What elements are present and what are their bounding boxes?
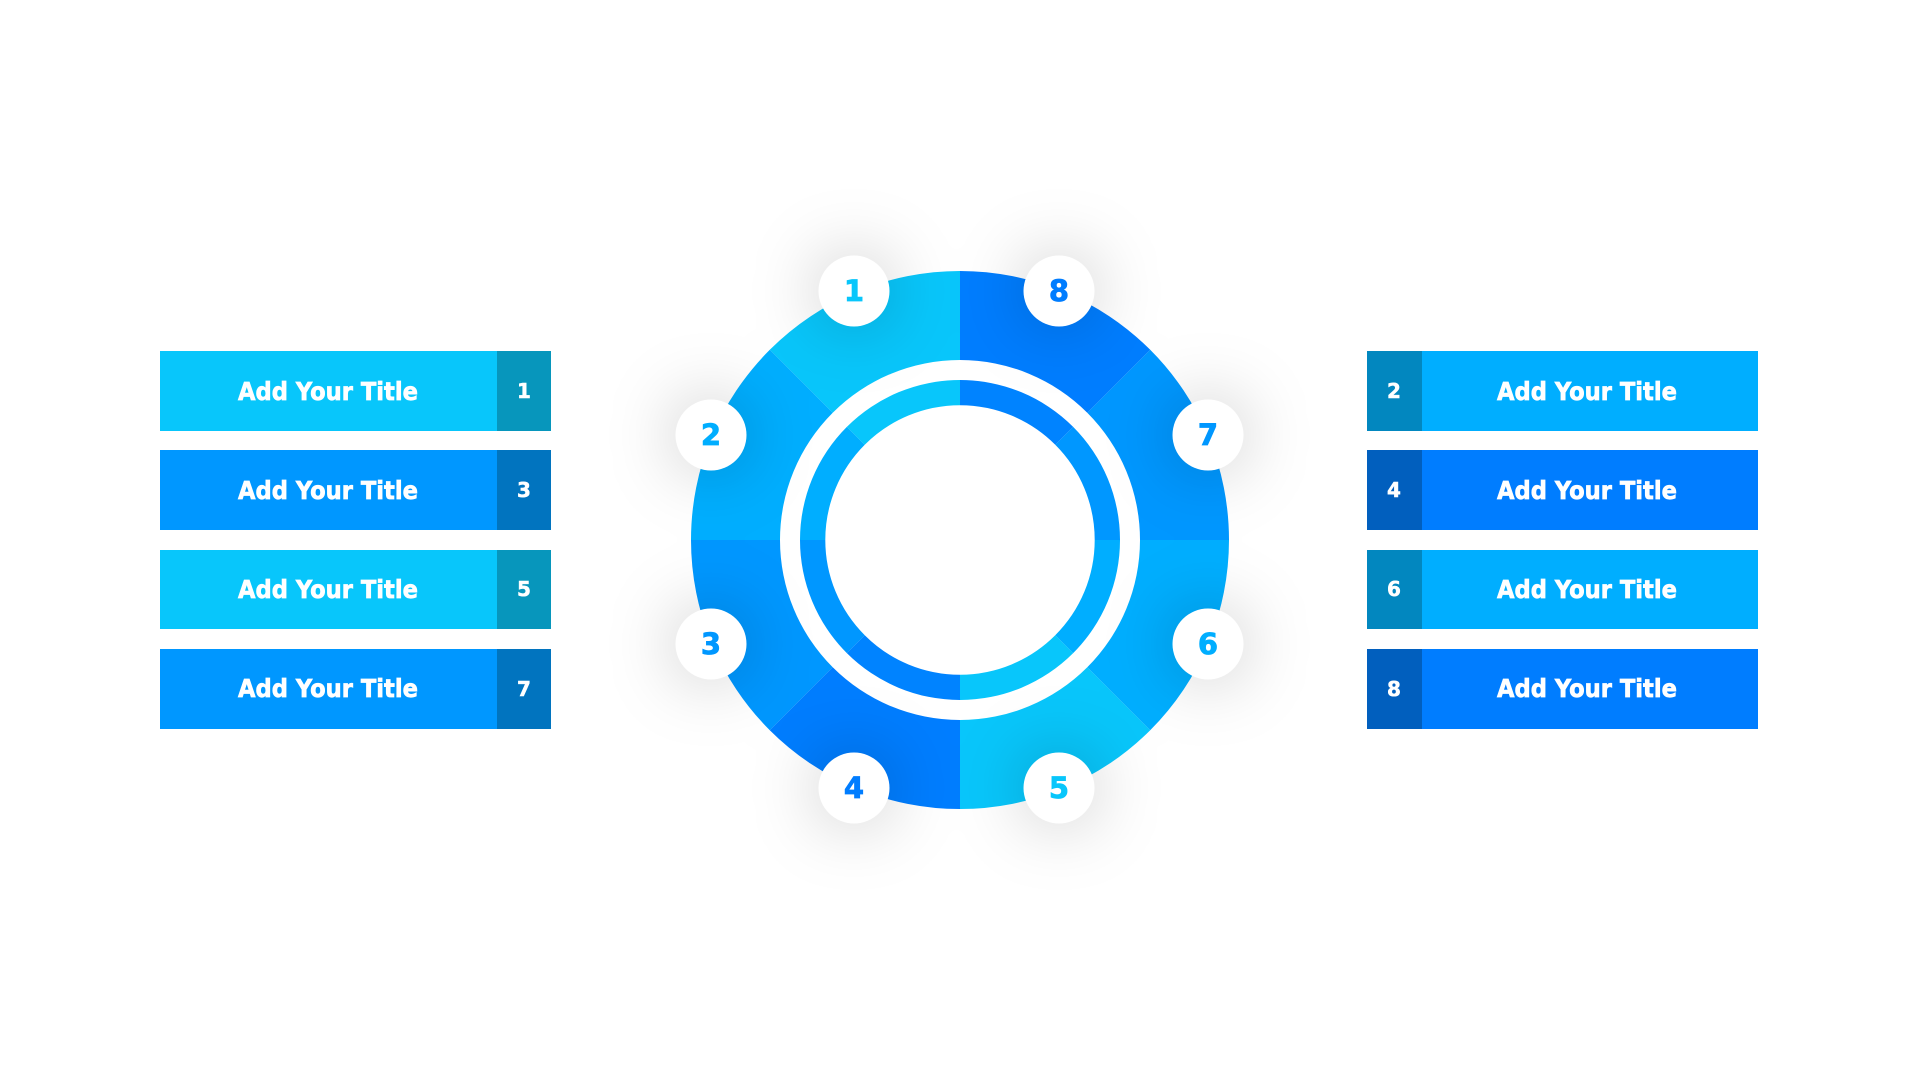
badge 8 [1024,256,1094,326]
bar: title 6 [1367,550,1758,629]
bar: title 5: Add Your Title [238,575,418,604]
bar: title 2: 2 [1387,379,1401,403]
panel: left title bars [160,351,551,729]
bar: title 3: 3 [517,478,531,502]
bar: title 1: Add Your Title [238,377,418,406]
bar: title 7: Add Your Title [238,674,418,703]
bar: title 2: Add Your Title [1497,377,1677,406]
badge 5 [1024,752,1094,824]
bar: title 3: Add Your Title [238,476,418,505]
bar: title 5 [160,550,551,629]
bar: title 4: Add Your Title [1497,476,1677,505]
badge 1 [818,256,890,326]
bar: title 7 [160,649,551,729]
badge 3: 3 [701,627,721,661]
bar: title 8: 8 [1387,677,1401,701]
outer ring segments [691,271,1229,809]
inner ring segments [800,380,1120,700]
badge 7: 7 [1198,418,1218,452]
badge 1: 1 [844,274,864,308]
bar: title 6: Add Your Title [1497,575,1677,604]
badge 4 [818,752,890,824]
bar: title 2 [1367,351,1758,431]
badge 2 [676,400,746,470]
badge 2: 2 [701,418,721,452]
bar: title 3 [160,450,551,530]
bar: title 4 [1367,450,1758,530]
bar: title 6: 6 [1387,577,1401,601]
badge 3 [676,608,746,680]
chart: eight segment circle [691,271,1229,809]
badge 5: 5 [1049,771,1069,805]
badge 6: 6 [1198,627,1218,661]
bar: title 5: 5 [517,577,531,601]
badge 4: 4 [844,771,864,805]
bar: title 1: 1 [517,379,531,403]
bar: title 8 [1367,649,1758,729]
panel: right title bars [1367,351,1758,729]
badge 8: 8 [1049,274,1069,308]
badge 7 [1172,400,1244,470]
bar: title 7: 7 [517,677,531,701]
bar: title 8: Add Your Title [1497,674,1677,703]
badge shadows [673,253,1246,826]
badge 6 [1172,608,1244,680]
bar: title 4: 4 [1387,478,1401,502]
bar: title 1 [160,351,551,431]
